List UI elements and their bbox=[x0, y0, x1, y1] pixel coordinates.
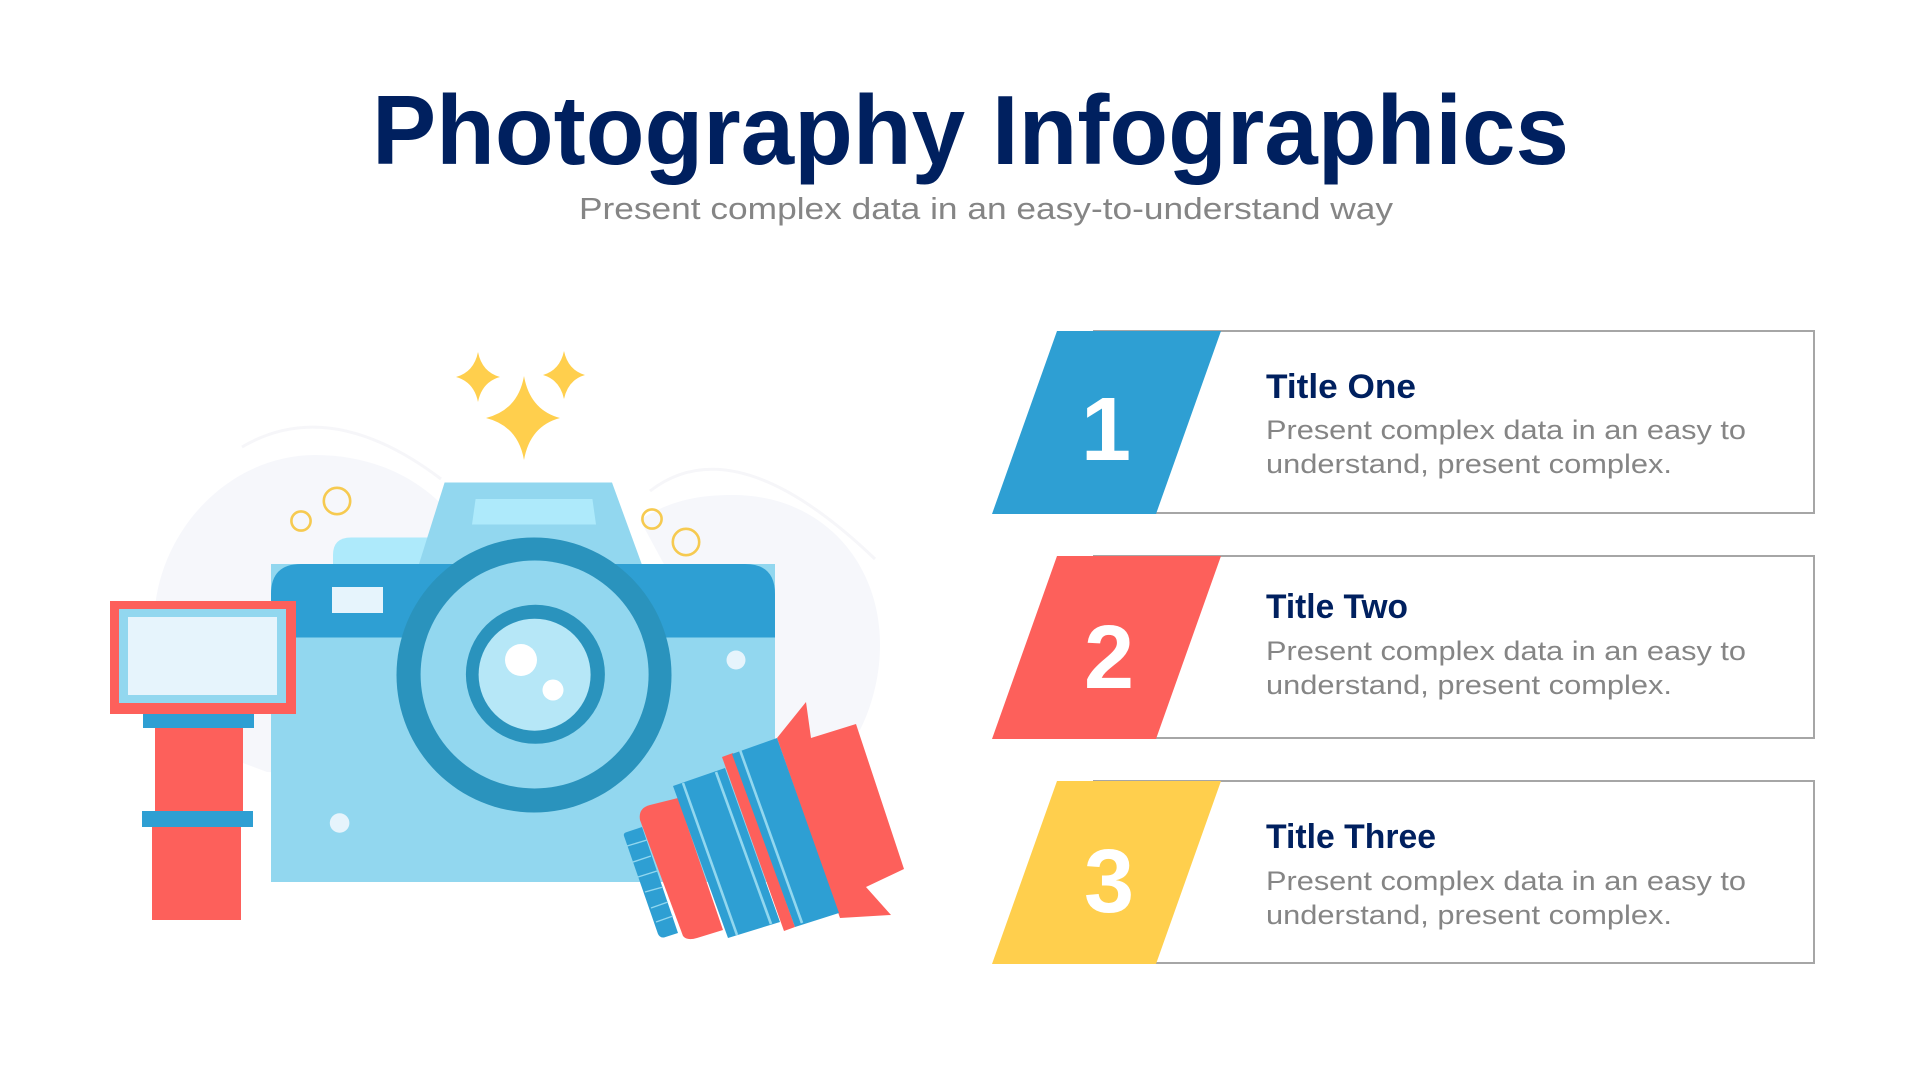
number tab 1 bbox=[992, 331, 1221, 514]
panel: item two bbox=[992, 556, 1814, 739]
camera body bbox=[271, 564, 775, 882]
lens bbox=[396, 538, 672, 812]
lens back barrel bbox=[640, 798, 723, 939]
number 1: 1 bbox=[1081, 380, 1131, 480]
body text 3: Present complex data in an easy to bbox=[1266, 866, 1746, 896]
lens ring bbox=[722, 753, 795, 931]
body text 1 bbox=[1266, 415, 1746, 479]
barrel lines bbox=[683, 750, 802, 935]
lens barrel front bbox=[673, 768, 780, 938]
illustration: camera scene bbox=[110, 351, 904, 939]
subtitle: Present complex data in an easy-to-understand way bbox=[579, 191, 1394, 226]
body text 1: Present complex data in an easy to bbox=[1266, 415, 1746, 445]
panel: item one bbox=[992, 331, 1814, 514]
lens barrel rear bbox=[732, 738, 839, 927]
icon: sparkles bbox=[456, 351, 585, 460]
camera top band bbox=[271, 564, 775, 638]
body text 2: understand, present complex. bbox=[1266, 670, 1672, 700]
detached lens bbox=[624, 702, 904, 939]
icon: small rings bbox=[291, 488, 699, 555]
number 3: 3 bbox=[1084, 832, 1134, 932]
body text 2 bbox=[1266, 636, 1746, 700]
background blobs and arcs bbox=[154, 427, 880, 780]
camera viewfinder window bbox=[332, 587, 383, 613]
number 2: 2 bbox=[1084, 608, 1134, 708]
body text 3 bbox=[1266, 866, 1746, 930]
lens grip bbox=[624, 827, 678, 938]
heading: Title One: Title One bbox=[1266, 368, 1416, 406]
flash post lower bbox=[152, 827, 241, 920]
title: Photography Infographics bbox=[372, 75, 1569, 185]
number tab 2 bbox=[992, 556, 1221, 739]
grip lines bbox=[627, 840, 673, 922]
lens hood bbox=[777, 702, 904, 918]
camera rear hump bbox=[333, 538, 430, 564]
body text 2: Present complex data in an easy to bbox=[1266, 636, 1746, 666]
heading: Title Three: Title Three bbox=[1266, 818, 1436, 856]
body text 1: understand, present complex. bbox=[1266, 449, 1672, 479]
flash head bbox=[110, 601, 296, 714]
number tab 3 bbox=[992, 781, 1221, 964]
pentaprism window bbox=[472, 499, 596, 524]
flash post upper bbox=[155, 728, 243, 811]
panel: item three bbox=[992, 781, 1814, 964]
camera pentaprism bbox=[419, 482, 642, 564]
camera bbox=[271, 482, 775, 882]
body text 3: understand, present complex. bbox=[1266, 900, 1672, 930]
heading: Title Two: Title Two bbox=[1266, 588, 1408, 626]
flash unit bbox=[110, 601, 296, 920]
body dots bbox=[330, 650, 746, 833]
flash bands bbox=[142, 714, 254, 827]
